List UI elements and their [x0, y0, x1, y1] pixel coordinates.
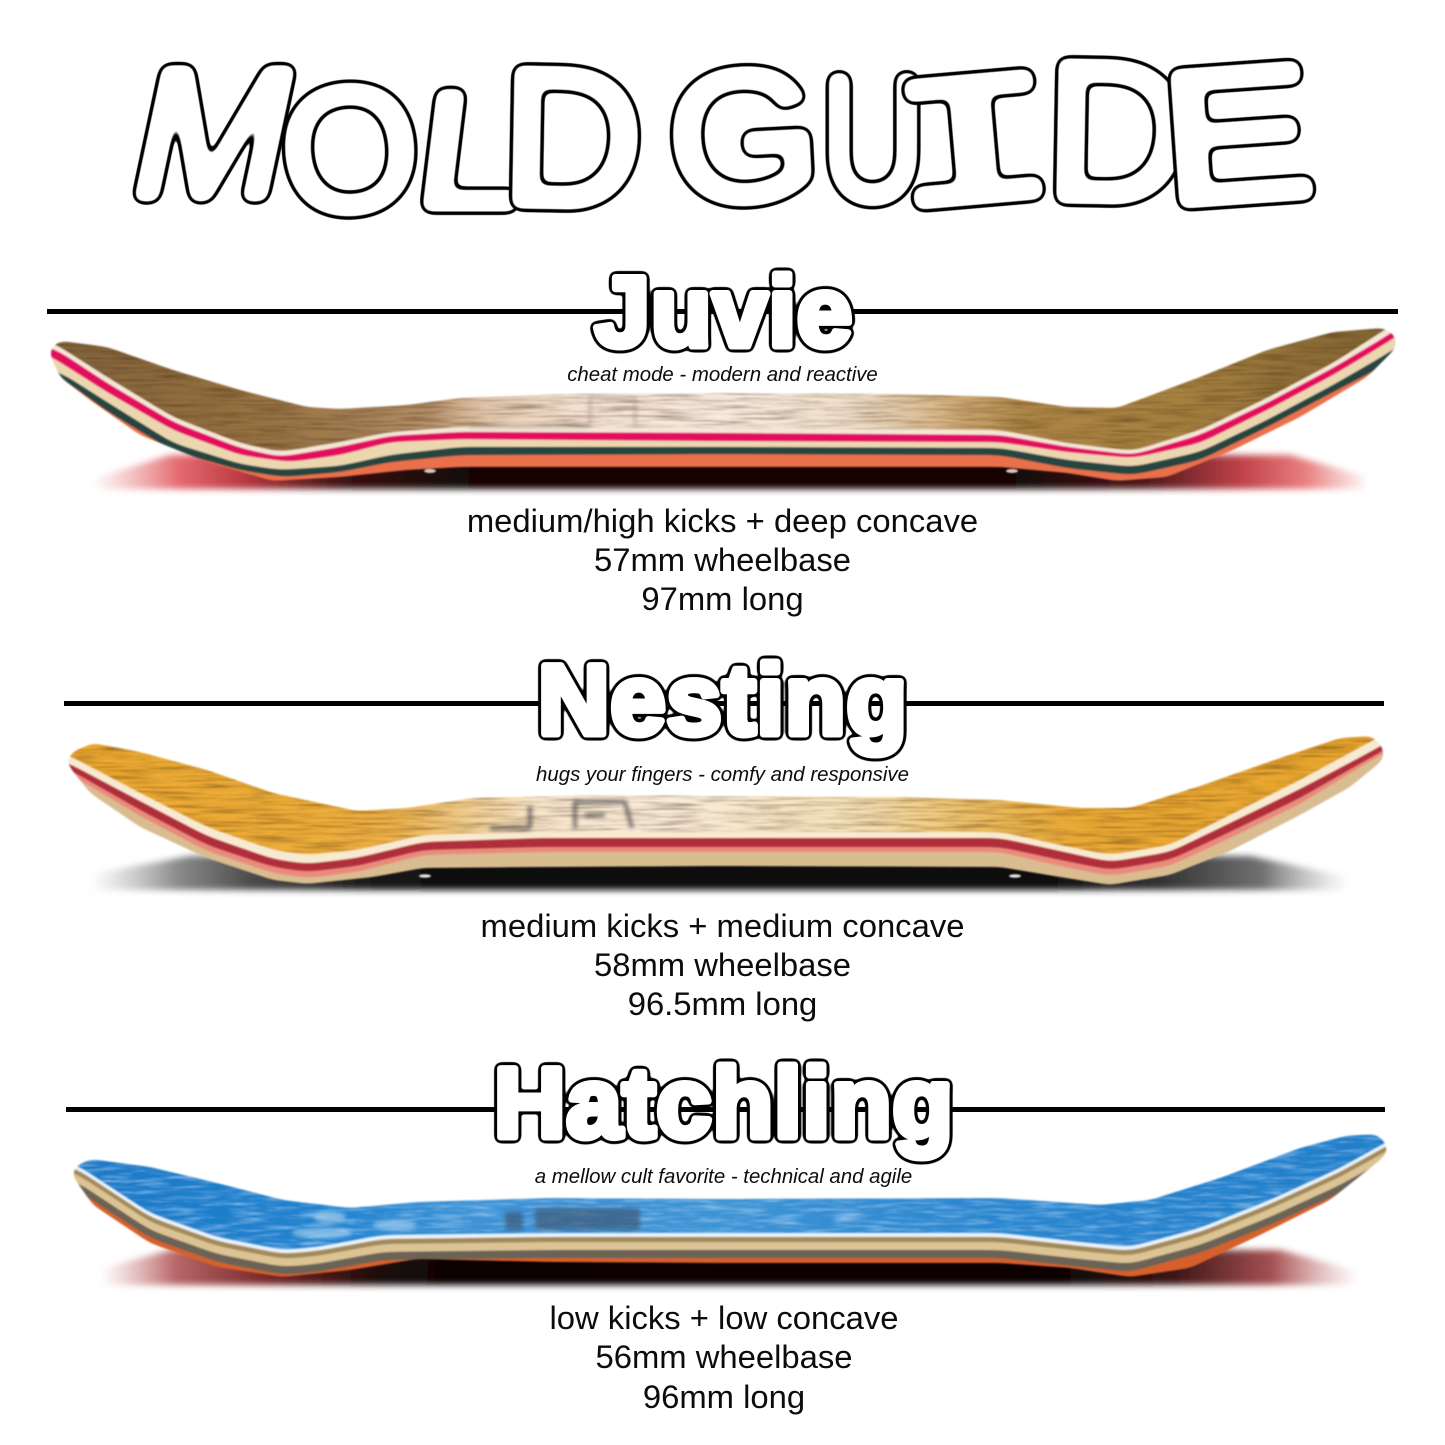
title letter I: I	[880, 40, 1070, 263]
worn patch: Hatchling	[292, 1211, 417, 1238]
panel: Hatchling	[66, 1058, 1388, 1414]
spec line: kicks and concave: medium kicks + medium concave	[481, 907, 964, 944]
tagline: Nesting: hugs your fingers - comfy and responsive	[536, 764, 909, 786]
title letter L: L	[408, 58, 536, 242]
panel: Juvie	[5, 256, 1440, 617]
skateboard deck: Hatchling	[72, 1133, 1388, 1278]
heading: Juvie: Juvie	[595, 256, 853, 367]
shadow: Hatchling deck	[95, 1250, 1355, 1285]
spec line: kicks and concave: low kicks + low concave	[549, 1299, 899, 1336]
skateboard deck: Nesting	[68, 735, 1384, 886]
title letter U: U	[822, 40, 924, 239]
title letter D second: D	[1044, 20, 1191, 243]
specs: Juvie	[467, 502, 978, 617]
spec line: wheelbase: 58mm wheelbase	[594, 946, 851, 983]
shadow: Juvie deck	[95, 455, 1365, 489]
heading: Nesting: Nesting	[538, 644, 908, 755]
title letter M: M	[116, 30, 314, 237]
spec line: wheelbase: 56mm wheelbase	[595, 1338, 853, 1375]
skateboard deck: Juvie	[50, 327, 1396, 482]
spec line: length: 96.5mm long	[628, 985, 817, 1022]
faint deck logo: Juvie	[470, 398, 635, 426]
title: MOLD GUIDE	[116, 20, 1321, 263]
divider line: Hatchling	[66, 1107, 1385, 1112]
faint deck logo: Nesting	[490, 802, 632, 828]
heading: Hatchling: Hatchling	[494, 1047, 954, 1158]
title letter G: G	[663, 29, 825, 244]
specs: Hatchling	[549, 1299, 899, 1415]
tagline: Juvie: cheat mode - modern and reactive	[567, 364, 878, 386]
divider line: Juvie	[47, 309, 1398, 314]
title letter E: E	[1154, 24, 1321, 246]
spec line: kicks and concave: medium/high kicks + deep concave	[467, 502, 978, 539]
title letter D: D	[500, 28, 644, 248]
truck bolt glints: Juvie	[424, 469, 1018, 473]
divider line: Nesting	[64, 701, 1384, 706]
faint deck logo: Hatchling	[505, 1208, 640, 1230]
spec line: length: 97mm long	[641, 580, 804, 617]
panel: Nesting	[64, 655, 1384, 1022]
truck bolt glints: Nesting	[419, 874, 1021, 878]
shadow: Nesting deck	[85, 856, 1345, 890]
title letter O: O	[275, 48, 425, 253]
spec line: length: 96mm long	[643, 1378, 805, 1415]
specs: Nesting	[481, 907, 964, 1022]
spec line: wheelbase: 57mm wheelbase	[594, 541, 851, 578]
tagline: Hatchling: a mellow cult favorite - technical and agile	[535, 1166, 912, 1188]
